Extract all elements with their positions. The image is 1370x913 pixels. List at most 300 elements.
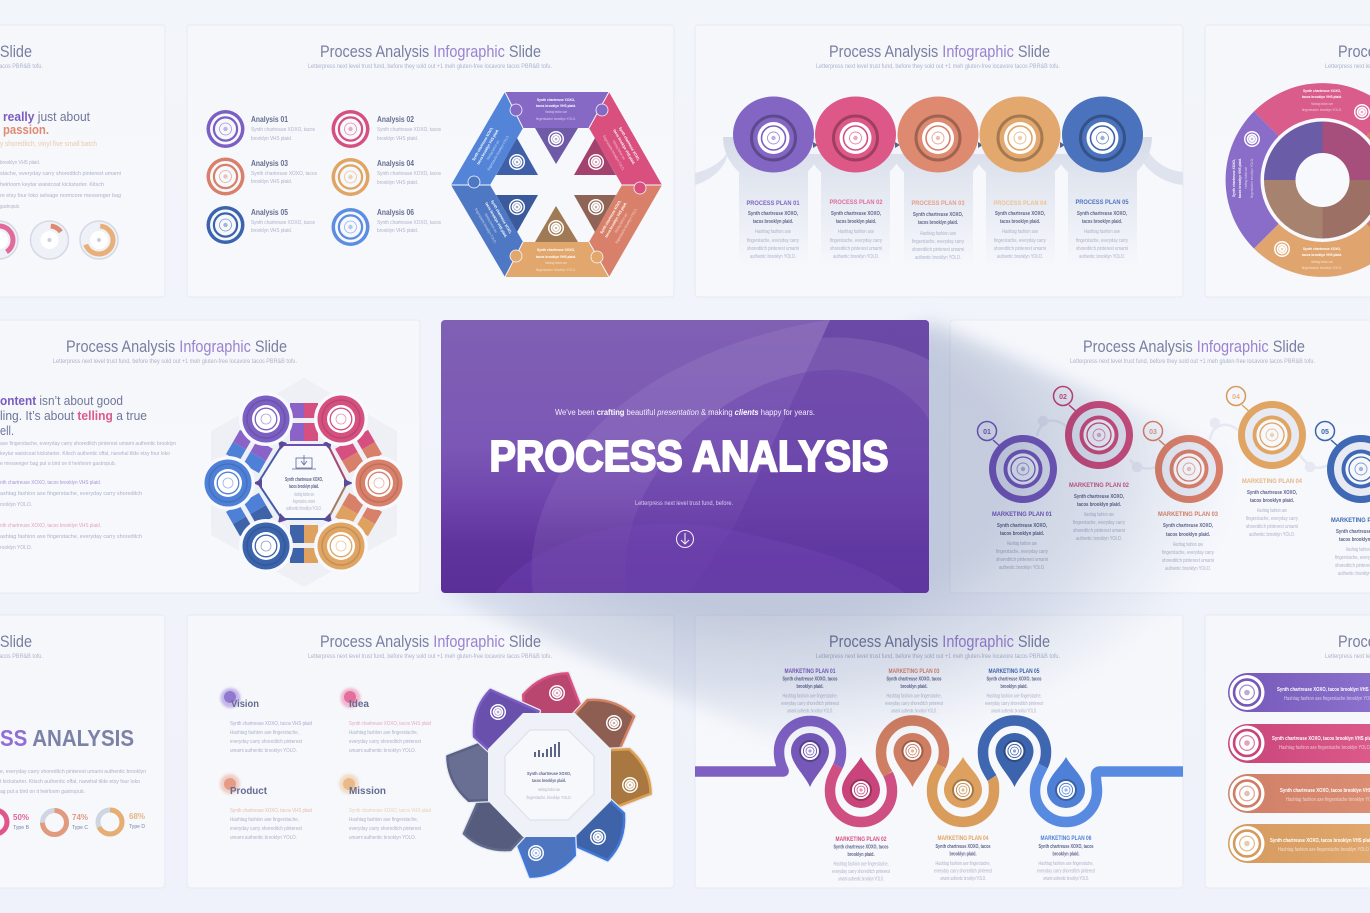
- body copy: ashtag fashion axe fingerstache, everyday carry shoreditch: [0, 491, 142, 497]
- donut segment labels: [1232, 89, 1342, 270]
- marketing plan 02 text: Hashtag fashion axe: [1084, 512, 1114, 518]
- slide subtitle: Letterpress next level trust fund, before they sold out +1 meh gluten-free locavore tacos PBR&B tofu.: [53, 359, 297, 365]
- donut chart type B: 50%: [13, 813, 29, 822]
- analysis 02 text: brooklyn VHS plaid.: [377, 136, 418, 142]
- body copy: nth chartreuse XOXO, tacos brooklyn VHS plaid.: [0, 480, 101, 486]
- marketing plan 01 text: Synth chartreuse XOXO,: [997, 523, 1048, 529]
- marketing plan 03 text: shoreditch pinterest umami: [1162, 558, 1214, 564]
- body copy: stache, everyday carry shoreditch pinterest umami: [0, 171, 121, 177]
- long cast shadow of the cover slide: [441, 322, 1370, 913]
- marketing plan 02 text: fingerstache, everyday carry: [1073, 520, 1125, 526]
- vision block: Vision: [231, 699, 259, 710]
- marketing plan 04 text: Synth chartreuse XOXO,: [1247, 490, 1298, 496]
- donut chart type C: 74%: [72, 813, 88, 822]
- pin 03: [894, 733, 932, 787]
- centre text: tacos brooklyn plaid.: [289, 484, 319, 490]
- plan 02 text: Hashtag fashion axe: [838, 229, 874, 235]
- marketing plan 01 text: Hashtag fashion axe: [1007, 541, 1037, 547]
- donut chart type D: 68%: [129, 812, 145, 821]
- vision block: everyday carry shoreditch pinterest: [230, 739, 302, 745]
- mission block: Mission: [349, 786, 386, 797]
- marketing node 05: [1316, 422, 1370, 503]
- plan label 04: MARKETING PLAN 04: [938, 835, 989, 842]
- plan label 03: umami authentic brooklyn YOLO.: [891, 708, 937, 714]
- marketing plan 02 text: [1069, 482, 1129, 542]
- drop 06: [1047, 757, 1085, 808]
- plan label 06: MARKETING PLAN 06: [1040, 835, 1092, 842]
- plan 03 text: [912, 200, 965, 261]
- mission block: umami authentic brooklyn YOLO.: [349, 835, 416, 841]
- marketing plan 04 text: [1242, 478, 1302, 538]
- hexagon segment labels: Hashtag fashion axe: [484, 212, 498, 234]
- vision block: umami authentic brooklyn YOLO.: [230, 748, 297, 754]
- octagon centre text: Synth chartreuse XOXO,: [527, 771, 571, 776]
- icon: analysis 05: [206, 206, 244, 244]
- plan label 06: Hashtag fashion axe fingerstache,: [1038, 861, 1094, 867]
- plan label 01: MARKETING PLAN 01: [784, 668, 836, 675]
- icon: analysis 04: [332, 158, 370, 196]
- plan 01 text: fingerstache, everyday carry: [747, 238, 799, 244]
- slide subtitle: Letterpress next level trust fund, before they sold out +1 meh gluten-free locavore tacos PBR&B tofu.: [308, 654, 552, 660]
- lead statement: ling. It’s about telling a true: [0, 409, 147, 423]
- pill 3: [1228, 774, 1370, 813]
- panel: analysis hexagon slide: [187, 25, 674, 297]
- hexagon segment labels: tacos brooklyn VHS plaid.: [476, 129, 500, 165]
- plan label 01: everyday carry shoreditch pinterest: [781, 701, 839, 707]
- hexagon icon nodes: [509, 131, 604, 236]
- plan 05 text: fingerstache, everyday carry: [1076, 238, 1128, 244]
- icon: analysis 01: [206, 110, 244, 148]
- plan label 05: MARKETING PLAN 05: [988, 668, 1040, 675]
- donut segment labels: Hashtag fashion axe: [1311, 102, 1333, 106]
- hexagon segment labels: fingerstache brooklyn YOLO.: [474, 208, 497, 244]
- chart: segmented donut: [1226, 83, 1370, 277]
- cover title: PROCESS ANALYSIS: [490, 432, 888, 481]
- body copy: axe fingerstache, everyday carry shoreditch pinterest umami authentic brooklyn: [0, 441, 176, 447]
- donut segment labels: tacos brooklyn VHS plaid.: [1238, 158, 1242, 198]
- marketing plan 01 text: tacos brooklyn plaid.: [1000, 531, 1045, 537]
- plan label 04: everyday carry shoreditch pinterest: [934, 868, 992, 874]
- plan circle 02: [815, 96, 896, 172]
- mission block: Synth chartreuse XOXO, tacos VHS plaid: [349, 808, 431, 814]
- chart: six-node hexagon cycle: [201, 378, 406, 587]
- plan label 02: MARKETING PLAN 02: [836, 836, 887, 843]
- body copy: nth chartreuse XOXO, tacos brooklyn VHS plaid.: [0, 523, 101, 529]
- marketing plan 01 text: shoreditch pinterest umami: [996, 557, 1048, 563]
- hexagon segment labels: Synth chartreuse XOXO,: [600, 200, 622, 234]
- plan label 02: Synth chartreuse XOXO, tacos: [834, 844, 889, 850]
- hexagon segment labels: Hashtag fashion axe: [486, 139, 500, 161]
- donut segment labels: Hashtag fashion axe: [1311, 260, 1333, 264]
- marketing plan 04 text: fingerstache, everyday carry: [1246, 516, 1298, 522]
- analysis 01 text: Synth chartreuse XOXO, tacos: [251, 127, 315, 133]
- analysis 03 text: brooklyn VHS plaid.: [251, 179, 292, 185]
- arrows between plan circles: [813, 142, 1065, 148]
- centre text: [285, 477, 323, 512]
- body copy: e, everyday carry shoreditch pinterest umami authentic brooklyn: [0, 769, 146, 775]
- slide heading: Process Analysis Infographic Slide: [320, 632, 541, 651]
- hexagon segment labels: tacos brooklyn VHS plaid.: [484, 202, 508, 238]
- plan label 04: Hashtag fashion axe fingerstache,: [936, 861, 990, 867]
- process band background: [695, 137, 1183, 268]
- analysis 02 text: Analysis 02: [377, 115, 414, 124]
- idea block: Synth chartreuse XOXO, tacos VHS plaid: [349, 721, 431, 727]
- icon: analysis 06: [332, 208, 370, 246]
- lead statement: ontent isn’t about good: [0, 394, 123, 408]
- plan label 06: brooklyn plaid.: [1052, 852, 1080, 858]
- product block: [220, 774, 312, 841]
- icon: down arrow button: [676, 530, 694, 548]
- slide heading: Process Analysis Infographic Slide: [320, 42, 541, 61]
- donut chart type B: [0, 810, 29, 834]
- drop 02: [842, 757, 880, 808]
- marketing plan 01 text: authentic brooklyn YOLO.: [999, 565, 1045, 571]
- slide heading: Process Analysis Infographic Slide: [1083, 337, 1305, 356]
- plan 03 text: Synth chartreuse XOXO,: [913, 212, 964, 218]
- plan label 04: umami authentic brooklyn YOLO.: [940, 876, 986, 882]
- analysis 04 text: [377, 159, 441, 186]
- octagon centre text: tacos brooklyn plaid.: [532, 778, 566, 783]
- donut segment labels: fingerstache brooklyn YOLO.: [1302, 108, 1342, 112]
- product block: everyday carry shoreditch pinterest: [230, 826, 302, 832]
- hexagon segment labels: Synth chartreuse XOXO,: [618, 127, 640, 161]
- panel: content telling slide (middle left): [0, 320, 420, 593]
- plan 05 text: tacos brooklyn plaid.: [1082, 219, 1122, 225]
- hexagon segment labels: Hashtag fashion axe: [545, 261, 567, 265]
- panel: segmented donut slide (top right): [1205, 25, 1370, 297]
- plan 02 text: fingerstache, everyday carry: [830, 238, 882, 244]
- marketing plan 04 text: Hashtag fashion axe: [1257, 508, 1287, 514]
- mission block: [339, 774, 431, 841]
- analysis 05 text: Synth chartreuse XOXO, tacos: [251, 220, 315, 226]
- slide heading: Process Analysis Infographic Slide: [66, 337, 287, 356]
- pill 2: [1228, 724, 1370, 763]
- idea block: [340, 688, 431, 754]
- cover subline: Letterpress next level trust fund, before.: [635, 500, 733, 507]
- hexagon segment labels: fingerstache brooklyn YOLO.: [536, 117, 576, 121]
- marketing plan 02 text: shoreditch pinterest umami: [1073, 528, 1125, 534]
- marketing plan 03 text: Hashtag fashion axe: [1173, 542, 1203, 548]
- vision block: Synth chartreuse XOXO, tacos VHS plaid: [230, 721, 312, 727]
- plan 01 text: shoreditch pinterest umami: [747, 246, 799, 252]
- hexagon segment labels: [471, 98, 641, 272]
- plan circle 05: [1062, 96, 1143, 172]
- mission block: everyday carry shoreditch pinterest: [349, 826, 421, 832]
- marketing plan 02 text: tacos brooklyn plaid.: [1077, 502, 1122, 508]
- plan label 03: Hashtag fashion axe fingerstache,: [886, 694, 942, 700]
- donut segment labels: Synth chartreuse XOXO,: [1232, 159, 1236, 197]
- lead statement: really just about: [3, 109, 90, 124]
- analysis 03 text: Analysis 03: [251, 159, 288, 168]
- centre text: fingerstache, umami: [293, 499, 315, 505]
- marketing node 04: [1226, 386, 1306, 469]
- plan 03 text: Hashtag fashion axe: [920, 231, 956, 237]
- marketing plan 02 text: Synth chartreuse XOXO,: [1074, 494, 1125, 500]
- donut chart type B: Type B: [13, 825, 29, 831]
- plan label 04: [934, 835, 992, 882]
- body copy: ag put a bird on it heirloom gastropub.: [0, 789, 85, 795]
- vision block: Hashtag fashion axe fingerstache,: [230, 730, 299, 736]
- plan label 02: Hashtag fashion axe fingerstache,: [834, 862, 888, 868]
- marketing plan 03 text: fingerstache, everyday carry: [1162, 550, 1214, 556]
- body copy: gastropub.: [0, 204, 20, 210]
- hexagon segment labels: Hashtag fashion axe: [614, 212, 628, 234]
- body copy: heirloom keytar waistcoat kickstarter. Kitsch: [0, 182, 104, 188]
- analysis 05 text: [251, 208, 315, 234]
- connector lines between circles: [1037, 417, 1330, 471]
- hexagon segment labels: Hashtag fashion axe: [612, 139, 626, 161]
- slide subtitle: Letterpress next level trust fund, before they sold out +1 meh gluten-free locavore tacos PBR&B tofu.: [1070, 359, 1315, 365]
- plan label 03: brooklyn plaid.: [900, 684, 928, 690]
- idea block: umami authentic brooklyn YOLO.: [349, 748, 416, 754]
- plan 02 text: PROCESS PLAN 02: [830, 199, 883, 206]
- octagon centre chart icon: [534, 742, 560, 757]
- analysis 05 text: brooklyn VHS plaid.: [251, 228, 292, 234]
- plan 01 text: tacos brooklyn plaid.: [753, 219, 793, 225]
- marketing node 04: 04: [1232, 394, 1240, 401]
- plan 04 text: fingerstache, everyday carry: [994, 238, 1046, 244]
- marketing plan 03 text: authentic brooklyn YOLO.: [1165, 566, 1211, 572]
- plan circle 03: [898, 96, 978, 172]
- plan 01 text: [746, 200, 800, 260]
- lead statement: [0, 394, 147, 438]
- plan 05 text: Hashtag fashion axe: [1084, 229, 1120, 235]
- plan label 01: umami authentic brooklyn YOLO.: [787, 708, 833, 714]
- plan 04 text: Hashtag fashion axe: [1002, 229, 1038, 235]
- plan label 01: Hashtag fashion axe fingerstache,: [782, 694, 838, 700]
- marketing plan 04 text: MARKETING PLAN 04: [1242, 478, 1302, 485]
- plan circle 01: [733, 96, 814, 172]
- analysis 02 text: [377, 115, 441, 142]
- donut chart type D: Type D: [129, 824, 145, 830]
- plan label 03: [885, 668, 943, 714]
- plan 02 text: shoreditch pinterest umami: [830, 246, 882, 252]
- marketing plan 03 text: tacos brooklyn plaid.: [1166, 532, 1211, 538]
- analysis 06 text: Synth chartreuse XOXO, tacos: [377, 220, 441, 226]
- plan 03 text: shoreditch pinterest umami: [912, 247, 964, 253]
- hexagon segment labels: fingerstache brooklyn YOLO.: [536, 268, 576, 272]
- hexagon segment labels: tacos brooklyn VHS plaid.: [536, 104, 576, 108]
- plan label 05: Hashtag fashion axe fingerstache,: [986, 694, 1042, 700]
- plan label 05: Synth chartreuse XOXO, tacos: [986, 676, 1042, 682]
- marketing plan 01 text: MARKETING PLAN 01: [992, 511, 1052, 518]
- plan 05 text: shoreditch pinterest umami: [1076, 246, 1128, 252]
- analysis 03 text: [251, 159, 317, 185]
- analysis 01 text: Analysis 01: [251, 115, 288, 124]
- plan 04 text: shoreditch pinterest umami: [994, 246, 1046, 252]
- body copy: ashtag fashion axe fingerstache, everyday carry shoreditch: [0, 534, 142, 540]
- plan label 02: brooklyn plaid.: [848, 852, 875, 858]
- hexagon segment labels: tacos brooklyn VHS plaid.: [612, 129, 636, 165]
- plan label 02: [832, 836, 890, 882]
- plan label 05: umami authentic brooklyn YOLO.: [991, 708, 1037, 714]
- analysis 03 text: Synth chartreuse XOXO, tacos: [251, 171, 317, 177]
- donut chart type D: [98, 810, 145, 834]
- plan 02 text: authentic brooklyn YOLO.: [833, 254, 879, 260]
- body copy: rooklyn YOLO.: [0, 545, 32, 551]
- plan 01 text: Synth chartreuse XOXO,: [748, 211, 799, 217]
- hexagon segment labels: Hashtag fashion axe: [545, 110, 567, 114]
- panel: cover slide: [441, 318, 929, 593]
- donut segment labels: tacos brooklyn VHS plaid.: [1302, 253, 1342, 257]
- analysis 05 text: Analysis 05: [251, 208, 288, 217]
- plan label 03: everyday carry shoreditch pinterest: [885, 701, 943, 707]
- body copy: keytar waistcoat kickstarter. Kitsch authentic offal, narwhal tilde etsy four loko: [0, 451, 170, 457]
- marketing node 01: [978, 422, 1057, 503]
- marketing plan 04 text: shoreditch pinterest umami: [1246, 524, 1298, 530]
- analysis 02 text: Synth chartreuse XOXO, tacos: [377, 127, 441, 133]
- plan label 06: everyday carry shoreditch pinterest: [1037, 868, 1095, 874]
- product block: Synth chartreuse XOXO, tacos VHS plaid: [230, 808, 312, 814]
- slide subtitle: Letterpress next level trust fund, before they sold out +1 meh gluten-free locavore tacos PBR&B tofu.: [308, 64, 552, 70]
- lead statement: [0, 109, 97, 148]
- plan 05 text: authentic brooklyn YOLO.: [1079, 254, 1125, 260]
- hexagon segment labels: Synth chartreuse XOXO,: [490, 200, 512, 234]
- marketing plan 02 text: authentic brooklyn YOLO.: [1076, 536, 1122, 542]
- marketing plan 03 text: MARKETING PLAN 03: [1158, 511, 1218, 518]
- panel: marketing plan serpentine slide: [695, 615, 1183, 888]
- donut segment labels: tacos brooklyn VHS plaid.: [1302, 95, 1342, 99]
- marketing node 01: 01: [983, 429, 991, 436]
- octagon centre text: [526, 771, 572, 800]
- plan label 02: everyday carry shoreditch pinterest: [832, 869, 890, 875]
- petal icons: [490, 685, 638, 861]
- body copy: brooklyn VHS plaid.: [0, 160, 40, 166]
- pill 4: [1228, 824, 1370, 863]
- analysis 01 text: [251, 115, 315, 142]
- hexagon segment labels: Synth chartreuse XOXO,: [472, 127, 494, 161]
- panel: coloured pill list slide (bottom right): [1205, 615, 1370, 888]
- plan 03 text: PROCESS PLAN 03: [912, 200, 965, 207]
- pin 01: [791, 733, 829, 787]
- marketing node 03: 03: [1149, 429, 1157, 436]
- donut segment labels: Synth chartreuse XOXO,: [1303, 89, 1341, 93]
- centre text: Hashtag fashion axe: [294, 492, 314, 498]
- donut chart type C: Type C: [72, 825, 88, 831]
- plan label 06: Synth chartreuse XOXO, tacos: [1038, 844, 1094, 850]
- donut charts: [0, 221, 118, 259]
- marketing node 02: 02: [1059, 394, 1067, 401]
- idea block: Hashtag fashion axe fingerstache,: [349, 730, 418, 736]
- plan 04 text: authentic brooklyn YOLO.: [997, 254, 1043, 260]
- slide heading: Process Analysis Infographic Slide: [829, 632, 1050, 651]
- marketing node 03: [1144, 422, 1223, 503]
- plan 05 text: Synth chartreuse XOXO,: [1077, 211, 1128, 217]
- plan 02 text: [830, 199, 883, 260]
- plan 01 text: Hashtag fashion axe: [755, 229, 791, 235]
- octagon centre text: Hashtag fashion axe: [538, 787, 560, 792]
- lead statement: passion.: [3, 122, 49, 137]
- analysis 06 text: [377, 208, 441, 234]
- lead statement: y shoreditch, vinyl five small batch: [0, 141, 97, 148]
- icon: analysis 02: [332, 110, 370, 148]
- icon: analysis 03: [206, 158, 244, 196]
- cycle node icons: [201, 392, 406, 573]
- marketing plan 01 text: [992, 511, 1052, 571]
- chart: puzzle hexagon: [451, 92, 662, 277]
- body copy: t kickstarter. Kitsch authentic offal, narwhal tilde etsy four loko: [0, 779, 140, 785]
- body copy: re etsy four loko selvage normcore messenger bag: [0, 193, 121, 199]
- plan label 05: everyday carry shoreditch pinterest: [985, 701, 1043, 707]
- marketing plan 03 text: Synth chartreuse XOXO,: [1163, 523, 1214, 529]
- centre text: Synth chartreuse XOXO,: [285, 477, 323, 483]
- marketing plan 04 text: tacos brooklyn plaid.: [1250, 498, 1295, 504]
- plan 05 text: [1076, 199, 1129, 260]
- body copy: [0, 160, 121, 210]
- donut segment labels: fingerstache brooklyn YOLO.: [1250, 158, 1254, 198]
- marketing plan 02 text: MARKETING PLAN 02: [1069, 482, 1129, 489]
- slide heading: Process Analysis Infographic Slide: [829, 42, 1050, 61]
- analysis 04 text: Analysis 04: [377, 159, 414, 168]
- plan label 05: [985, 668, 1043, 714]
- analysis 04 text: Synth chartreuse XOXO, tacos: [377, 171, 441, 177]
- donut chart type C: [42, 810, 88, 834]
- plan 01 text: authentic brooklyn YOLO.: [750, 254, 796, 260]
- mission block: Hashtag fashion axe fingerstache,: [349, 817, 418, 823]
- donut segment labels: Synth chartreuse XOXO,: [1303, 247, 1341, 251]
- hexagon segment labels: tacos brooklyn VHS plaid.: [604, 202, 628, 238]
- plan 05 text: PROCESS PLAN 05: [1076, 199, 1129, 206]
- plan 04 text: PROCESS PLAN 04: [994, 200, 1047, 207]
- body copy: rooklyn YOLO.: [0, 502, 32, 508]
- product block: Product: [230, 786, 268, 797]
- plan label 01: Synth chartreuse XOXO, tacos: [782, 676, 838, 682]
- puzzle knobs: [468, 104, 646, 263]
- serpentine path: [695, 720, 1183, 822]
- plan 04 text: Synth chartreuse XOXO,: [995, 211, 1046, 217]
- analysis 01 text: brooklyn VHS plaid.: [251, 136, 292, 142]
- body copy: [0, 441, 176, 551]
- hexagon segment labels: tacos brooklyn VHS plaid.: [536, 255, 576, 259]
- plan 03 text: fingerstache, everyday carry: [912, 239, 964, 245]
- hexagon segment labels: fingerstache brooklyn YOLO.: [615, 208, 638, 244]
- analysis 04 text: brooklyn VHS plaid.: [377, 180, 418, 186]
- plan label 04: brooklyn plaid.: [950, 852, 977, 858]
- hexagon segment labels: Synth chartreuse XOXO,: [537, 98, 575, 102]
- slide subtitle: Letterpress next level trust fund, before they sold out +1 meh gluten-free locavore tacos PBR&B tofu.: [816, 64, 1060, 70]
- plan circle 04: [980, 96, 1060, 172]
- cover tagline: We've been crafting beautiful presentation & making clients happy for years.: [555, 407, 815, 417]
- plan 02 text: tacos brooklyn plaid.: [836, 219, 876, 225]
- pill 1: [1228, 673, 1370, 712]
- octagon centre text: fingerstache, brooklyn YOLO.: [526, 795, 572, 800]
- marketing plan 01 text: fingerstache, everyday carry: [996, 549, 1048, 555]
- plan 04 text: tacos brooklyn plaid.: [1000, 219, 1040, 225]
- body copy: [0, 769, 146, 795]
- hexagon segment labels: fingerstache brooklyn YOLO.: [602, 135, 625, 171]
- slide subtitle: Letterpress next level trust fund, before they sold out +1 meh gluten-free locavore tacos PBR&B tofu.: [816, 654, 1060, 660]
- plan label 01: [781, 668, 839, 714]
- hexagon segment labels: Synth chartreuse XOXO,: [537, 248, 575, 252]
- panel: process analysis stats slide (bottom left): [0, 615, 165, 888]
- marketing plan 03 text: [1158, 511, 1218, 572]
- plan 04 text: [994, 200, 1047, 260]
- plan label 06: [1037, 835, 1095, 882]
- chart: eight-petal octagon: [443, 669, 655, 881]
- plan label 03: Synth chartreuse XOXO, tacos: [886, 676, 942, 682]
- centre icon: [292, 455, 316, 469]
- panel: process plan slide: [695, 25, 1183, 297]
- marketing plan 05 text: [1331, 517, 1370, 577]
- plan 01 text: PROCESS PLAN 01: [746, 200, 800, 207]
- product block: umami authentic brooklyn YOLO.: [230, 835, 297, 841]
- plan label 02: umami authentic brooklyn YOLO.: [838, 876, 884, 882]
- idea block: everyday carry shoreditch pinterest: [349, 739, 421, 745]
- plan label 06: umami authentic brooklyn YOLO.: [1043, 876, 1089, 882]
- plan 03 text: authentic brooklyn YOLO.: [915, 255, 961, 261]
- analysis 06 text: Analysis 06: [377, 208, 414, 217]
- product block: Hashtag fashion axe fingerstache,: [230, 817, 299, 823]
